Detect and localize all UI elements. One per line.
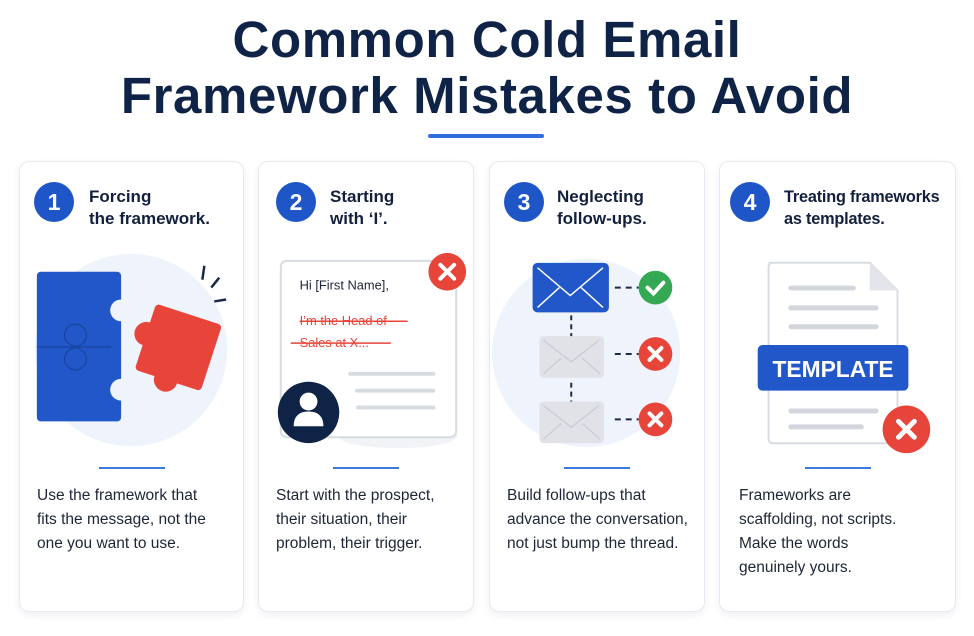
icon: template document: [758, 262, 930, 454]
body text 1: [37, 487, 206, 552]
number badge 1: [34, 182, 74, 222]
icon: follow-up email chain: [492, 259, 680, 447]
title: Framework Mistakes to Avoid: [121, 67, 853, 124]
body text 4: Make the words: [739, 535, 848, 552]
body text 4: genuinely yours.: [739, 559, 852, 576]
number badge 4: [730, 182, 770, 222]
heading 1: the framework.: [89, 209, 210, 228]
body text 2: problem, their trigger.: [276, 535, 422, 552]
icon: puzzle pieces: [35, 254, 227, 446]
body text 1: Use the framework that: [37, 487, 197, 504]
number badge 3: 3: [518, 189, 530, 215]
title underline: [428, 134, 544, 138]
icon: email with avatar: Sales at X...: [300, 335, 369, 350]
panel: starting with I: [258, 161, 474, 612]
title: [121, 11, 853, 124]
heading 1: Forcing: [89, 187, 151, 206]
body text 2: Start with the prospect,: [276, 487, 435, 504]
panel: neglecting follow-ups: [489, 161, 705, 612]
heading 4: [784, 188, 939, 228]
heading 4: as templates.: [784, 210, 885, 228]
body text 2: [276, 487, 435, 552]
body text 1: one you want to use.: [37, 535, 180, 552]
panel: forcing the framework: [19, 161, 244, 612]
heading 3: follow-ups.: [557, 209, 647, 228]
heading 2: [330, 187, 394, 228]
icon: email with avatar: [278, 252, 466, 448]
heading 3: [557, 187, 647, 228]
body text 4: [739, 487, 896, 576]
body text 4: Frameworks are: [739, 487, 851, 504]
title: Common Cold Email: [233, 11, 741, 68]
panel: treating frameworks as templates: [719, 161, 956, 612]
number badge 2: [276, 182, 316, 222]
body text 1: fits the message, not the: [37, 511, 206, 528]
number badge 2: 2: [290, 189, 302, 215]
divider: [333, 467, 399, 469]
icon: template document: TEMPLATE: [772, 356, 894, 382]
body text 2: their situation, their: [276, 511, 407, 528]
heading 2: with ‘I’.: [330, 209, 388, 228]
divider: [98, 467, 164, 469]
icon: email with avatar: Hi [First Name],: [300, 278, 389, 293]
number badge 3: [504, 182, 544, 222]
heading 4: Treating frameworks: [784, 188, 939, 206]
divider: [564, 467, 630, 469]
body text 4: scaffolding, not scripts.: [739, 511, 896, 528]
body text 3: advance the conversation,: [507, 511, 688, 528]
number badge 4: 4: [744, 189, 756, 215]
divider: [804, 467, 870, 469]
body text 3: not just bump the thread.: [507, 535, 678, 552]
heading 1: [89, 187, 210, 228]
icon: email with avatar: I’m the Head of: [300, 313, 387, 328]
heading 3: Neglecting: [557, 187, 644, 206]
body text 3: Build follow-ups that: [507, 487, 646, 504]
body text 3: [507, 487, 688, 552]
number badge 1: 1: [48, 189, 60, 215]
heading 2: Starting: [330, 187, 394, 206]
